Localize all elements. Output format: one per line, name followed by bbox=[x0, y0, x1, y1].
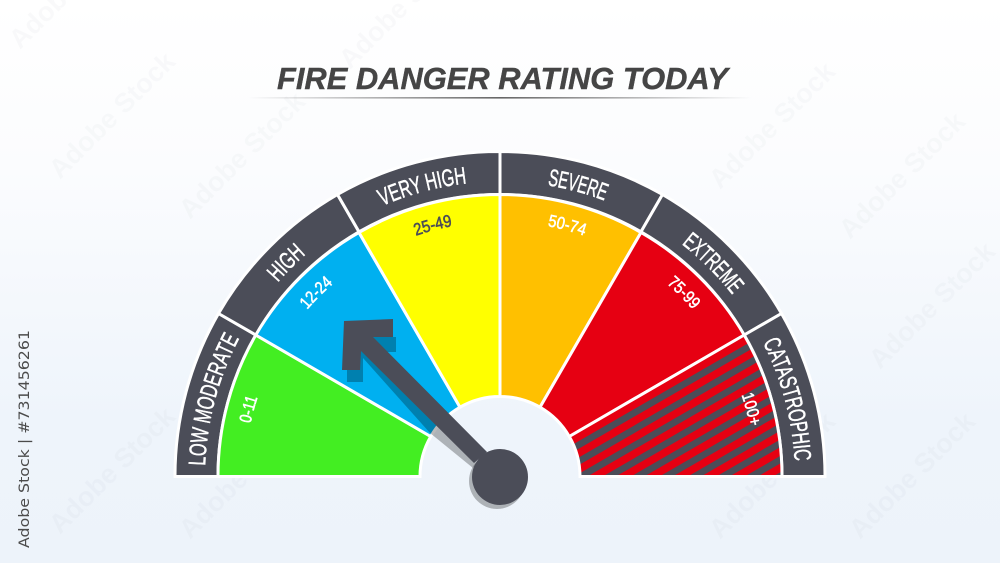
watermark: Adobe Stock bbox=[703, 406, 842, 544]
segment: low moderate bbox=[218, 335, 431, 476]
watermark: Adobe Stock bbox=[833, 106, 972, 244]
watermark: Adobe Stock bbox=[703, 56, 842, 194]
label: very high: VERY HIGH bbox=[376, 166, 466, 204]
watermark: Adobe Stock bbox=[43, 46, 182, 184]
ring labels bbox=[188, 166, 812, 508]
label: severe: SEVERE bbox=[548, 169, 610, 201]
watermark: Adobe Stock bbox=[863, 236, 1000, 374]
segment: very high bbox=[359, 194, 500, 407]
number: 75-99: 75-99 bbox=[668, 275, 700, 308]
panel: label ring bbox=[175, 151, 825, 476]
number: 25-49: 25-49 bbox=[414, 214, 452, 236]
gauge bbox=[174, 153, 826, 509]
label: high: HIGH bbox=[266, 242, 306, 282]
segment: high bbox=[256, 232, 460, 436]
watermark: Adobe Stock bbox=[843, 406, 982, 544]
segment: severe bbox=[500, 194, 641, 407]
needle shadow bbox=[347, 337, 525, 509]
title underline bbox=[248, 97, 752, 99]
side credit text: Adobe Stock | #731456261 bbox=[17, 330, 33, 548]
needle arrow bbox=[342, 319, 487, 463]
panel: rating segments bbox=[216, 193, 784, 478]
number: 12-24: 12-24 bbox=[300, 276, 332, 310]
segment: extreme bbox=[540, 232, 744, 436]
number: 100+: 100+ bbox=[742, 392, 760, 426]
number: 0-11: 0-11 bbox=[239, 396, 258, 422]
needle hub bbox=[472, 449, 528, 505]
watermark: Adobe Stock bbox=[173, 406, 312, 544]
watermark: Adobe Stock bbox=[173, 86, 312, 224]
label: catastrophic: CATASTROPHIC bbox=[764, 338, 812, 460]
label: low moderate: LOW MODERATE bbox=[188, 332, 240, 465]
segment: catastrophic (striped) bbox=[569, 334, 784, 478]
watermark: Adobe Stock bbox=[43, 401, 182, 539]
needle bbox=[342, 319, 528, 509]
label: extreme: EXTREME bbox=[682, 232, 745, 295]
range numbers bbox=[239, 214, 760, 426]
title: FIRE DANGER RATING TODAY bbox=[277, 61, 731, 96]
number: 50-74: 50-74 bbox=[548, 214, 586, 236]
